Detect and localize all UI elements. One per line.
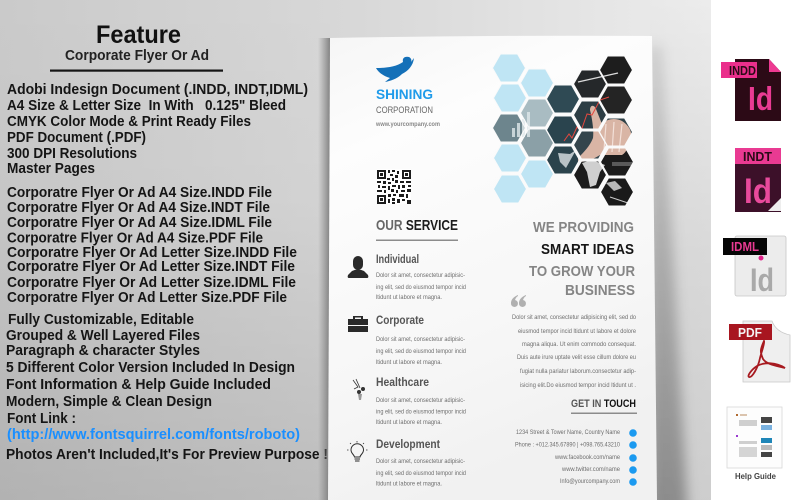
icon: quotation mark bbox=[511, 295, 526, 307]
contact icons bbox=[629, 429, 637, 486]
service name: Individual bbox=[376, 254, 419, 266]
light blue hexagons bbox=[492, 54, 554, 203]
feature list: formats: A4 Size & Letter Size In With 0.125" Bleed bbox=[7, 98, 286, 114]
feature list: files: Corporatre Flyer Or Ad A4 Size.INDT File bbox=[7, 200, 270, 216]
headline: we providing smart ideas: TO GROW YOUR bbox=[529, 263, 635, 280]
service text: ltidunt ut labore et magna. bbox=[376, 360, 442, 366]
heading: our service bbox=[376, 217, 458, 241]
service text: Dolor sit amet, consectetur adipisic- bbox=[376, 459, 465, 465]
feature list: formats: CMYK Color Mode & Print Ready Files bbox=[7, 114, 251, 130]
service text: Dolor sit amet, consectetur adipisic- bbox=[376, 398, 465, 404]
background: white icon column bbox=[711, 0, 800, 500]
service text: ing elit, sed do eiusmod tempor incid bbox=[376, 285, 466, 291]
feature list: files: Corporatre Flyer Or Ad A4 Size.INDD File bbox=[7, 185, 272, 201]
preview disclaimer: Photos Aren't Included,It's For Preview Purpose ! bbox=[6, 447, 328, 463]
QR code bbox=[377, 169, 411, 204]
icon: blue bird bbox=[376, 57, 414, 82]
icon: INDT file bbox=[735, 148, 781, 212]
service name: Healthcare bbox=[376, 377, 429, 389]
service text bbox=[376, 273, 466, 301]
icon: briefcase bbox=[348, 316, 368, 332]
company url: www.yourcompany.com bbox=[375, 122, 440, 128]
intro paragraph: Dolor sit amet, consectetur adipisicing elit, sed do bbox=[512, 315, 637, 321]
icon: IDML file bbox=[723, 236, 786, 298]
service text: ing elit, sed do eiusmod tempor incid bbox=[376, 471, 466, 477]
company subtitle: CORPORATION bbox=[376, 105, 433, 115]
icon: person bbox=[348, 256, 368, 278]
dark photo hexagons bbox=[546, 56, 634, 206]
feature list: files: Corporatre Flyer Or Ad Letter Size.PDF File bbox=[7, 290, 287, 306]
flyer paper bbox=[328, 36, 657, 500]
feature list: files: Corporatre Flyer Or Ad Letter Size.IDML File bbox=[7, 275, 296, 291]
photo details: hand, chart line and world map bbox=[558, 73, 634, 203]
icon: INDD file: INDD bbox=[729, 63, 756, 78]
feature list: design notes: Modern, Simple & Clean Design bbox=[6, 394, 212, 410]
intro paragraph: fugiat nulla pariatur laborum.consectetur adip- bbox=[520, 369, 636, 375]
icon: INDD file: Id bbox=[748, 80, 773, 117]
feature list: design notes: Paragraph & character Styles bbox=[6, 343, 200, 359]
feature list: design notes: Fully Customizable, Editable bbox=[8, 312, 194, 328]
feature list: design notes: 5 Different Color Version Included In Design bbox=[6, 360, 295, 376]
intro paragraph bbox=[512, 315, 637, 389]
headline: we providing smart ideas: WE PROVIDING bbox=[533, 219, 634, 236]
feature list: design notes: Font Information & Help Guide Included bbox=[6, 377, 271, 393]
service: healthcare bbox=[353, 377, 466, 426]
logo bbox=[375, 57, 440, 128]
icon: IDML file: Id bbox=[750, 262, 774, 298]
flyer right shadow bbox=[648, 46, 688, 500]
service text: ltidunt ut labore et magna. bbox=[376, 420, 442, 426]
feature list: formats: Adobi Indesign Document (.INDD, INDT,IDML) bbox=[7, 82, 308, 98]
title underline bbox=[50, 70, 223, 72]
service text: ing elit, sed do eiusmod tempor incid bbox=[376, 410, 466, 416]
icon: flower vase bbox=[353, 379, 365, 400]
contact details: www.twitter.com/name bbox=[561, 467, 621, 473]
service name: Development bbox=[376, 439, 440, 451]
flyer shadow bbox=[318, 38, 330, 500]
headline: we providing smart ideas bbox=[529, 219, 635, 299]
headline: we providing smart ideas: BUSINESS bbox=[565, 282, 635, 299]
white hexagon gaps bbox=[492, 54, 634, 206]
feature list: formats: 300 DPI Resolutions bbox=[7, 146, 137, 162]
background: lower right shading bbox=[650, 0, 711, 500]
feature list: formats: Master Pages bbox=[7, 161, 95, 177]
contact details bbox=[515, 430, 621, 485]
icon: INDT file: Id bbox=[744, 172, 772, 211]
feature list: files: Corporatre Flyer Or Ad Letter Size.INDT File bbox=[7, 259, 295, 275]
contact details: Info@yourcompany.com bbox=[560, 479, 620, 485]
title: Feature bbox=[96, 21, 181, 49]
icon: IDML file: IDML bbox=[731, 239, 759, 254]
background: lower left shading bbox=[0, 0, 330, 500]
service text: ltidunt ut labore et magna. bbox=[376, 295, 442, 301]
feature list: files: Corporatre Flyer Or Ad A4 Size.IDML File bbox=[7, 215, 272, 231]
icon: INDT file: INDT bbox=[743, 149, 772, 164]
service: individual bbox=[348, 254, 466, 301]
service: corporate bbox=[348, 315, 466, 366]
intro paragraph: isicing elit.Do eiusmod tempor incid ltidunt ut . bbox=[520, 383, 636, 389]
feature list: files bbox=[7, 185, 297, 306]
intro paragraph: eiusmod tempor incid ltidunt ut labore et dolore bbox=[518, 329, 637, 335]
service text: ltidunt ut labore et magna. bbox=[376, 482, 442, 488]
feature list: formats bbox=[7, 82, 308, 177]
feature list: design notes bbox=[6, 312, 295, 427]
heading: our service: OUR SERVICE bbox=[376, 217, 458, 234]
feature list: files: Corporatre Flyer Or Ad A4 Size.PDF File bbox=[7, 230, 263, 246]
subtitle: Corporate Flyer Or Ad bbox=[65, 48, 209, 64]
service text: Dolor sit amet, consectetur adipisic- bbox=[376, 273, 465, 279]
service text bbox=[376, 337, 466, 366]
icon: light bulb bbox=[347, 441, 368, 461]
font link: (http://www.fontsquirrel.com/fonts/roboto) bbox=[7, 427, 300, 443]
service: development bbox=[347, 439, 466, 488]
icon: PDF file bbox=[729, 321, 790, 382]
company name: SHINING bbox=[376, 86, 433, 102]
feature text column bbox=[6, 21, 328, 463]
icon: PDF file: PDF bbox=[738, 325, 762, 340]
contact details: Phone : +012.345.67890 | +098.765.43210 bbox=[515, 442, 621, 448]
panel: flyer page bbox=[328, 36, 657, 500]
feature list: design notes: Font Link : bbox=[7, 411, 76, 427]
icon: help guide bbox=[727, 407, 782, 481]
intro paragraph: magna aliqua. Ut enim commodo consequat. bbox=[522, 342, 636, 348]
feature list: formats: PDF Document (.PDF) bbox=[7, 130, 146, 146]
contact details: 1234 Street & Tower Name, Country Name bbox=[516, 430, 621, 436]
feature list: files: Corporatre Flyer Or Ad Letter Size.INDD File bbox=[7, 245, 297, 261]
contact details: www.facebook.com/name bbox=[554, 455, 621, 461]
service text: Dolor sit amet, consectetur adipisic- bbox=[376, 337, 465, 343]
hexagon photo collage bbox=[492, 54, 634, 206]
service text: ing elit, sed do eiusmod tempor incid bbox=[376, 349, 466, 355]
intro paragraph: Duis aute irure uptate velit esse cillum dolore eu bbox=[517, 355, 636, 361]
grey chart hexagons bbox=[492, 99, 554, 157]
heading: get in touch: GET IN TOUCH bbox=[571, 398, 636, 410]
headline: we providing smart ideas: SMART IDEAS bbox=[541, 241, 634, 258]
service text bbox=[376, 459, 466, 488]
feature list: design notes: Grouped & Well Layered Files bbox=[6, 328, 200, 344]
icon: INDD file bbox=[721, 59, 781, 121]
service name: Corporate bbox=[376, 315, 424, 327]
service text bbox=[376, 398, 466, 426]
icon: help guide: Help Guide bbox=[735, 471, 776, 481]
